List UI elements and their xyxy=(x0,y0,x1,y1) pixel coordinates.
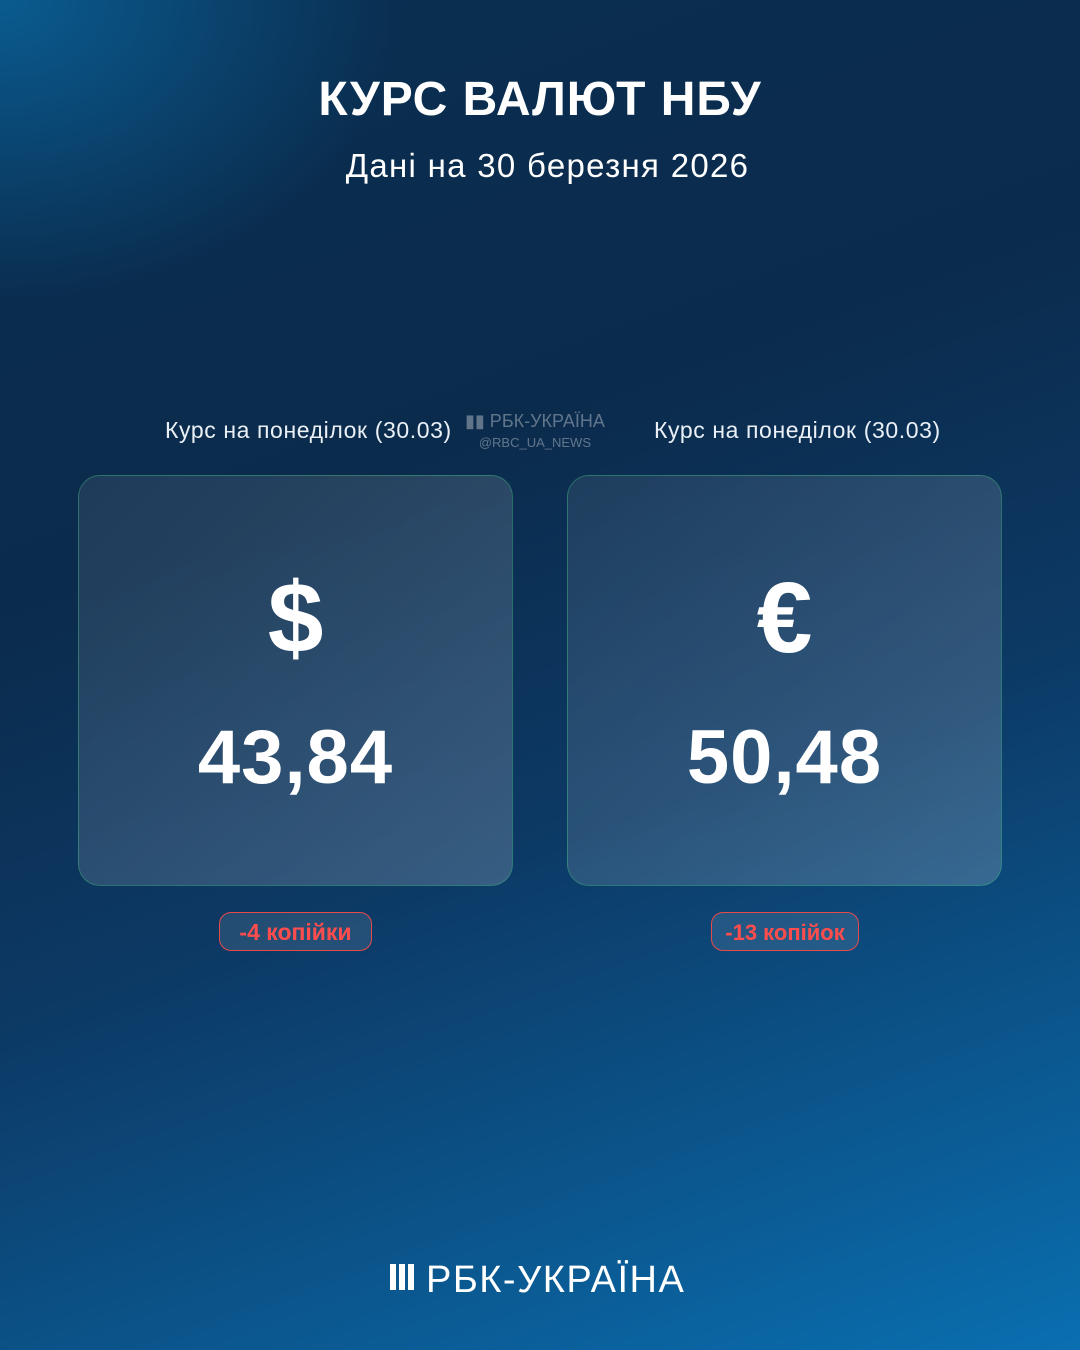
watermark xyxy=(465,411,605,450)
icon: euro: € xyxy=(757,562,812,674)
value usd: 43,84 xyxy=(198,715,393,800)
badge usd xyxy=(219,912,372,951)
icon: dollar: $ xyxy=(268,562,323,674)
subtitle: Дані на 30 березня 2026 xyxy=(346,147,749,184)
value eur: 50,48 xyxy=(687,715,882,800)
label: usd: Курс на понеділок (30.03) xyxy=(165,417,452,443)
panel: eur xyxy=(567,475,1002,886)
badge eur: -13 копійок xyxy=(725,920,845,945)
badge usd: -4 копійки xyxy=(239,919,352,945)
watermark: @RBC_UA_NEWS xyxy=(479,435,591,450)
watermark: ▮▮ РБК-УКРАЇНА xyxy=(465,411,605,431)
label: eur: Курс на понеділок (30.03) xyxy=(654,417,941,443)
badge eur xyxy=(711,912,859,951)
title: КУРС ВАЛЮТ НБУ xyxy=(318,73,762,126)
logo: РБК-УКРАЇНА xyxy=(426,1259,685,1301)
panel: usd xyxy=(78,475,513,886)
